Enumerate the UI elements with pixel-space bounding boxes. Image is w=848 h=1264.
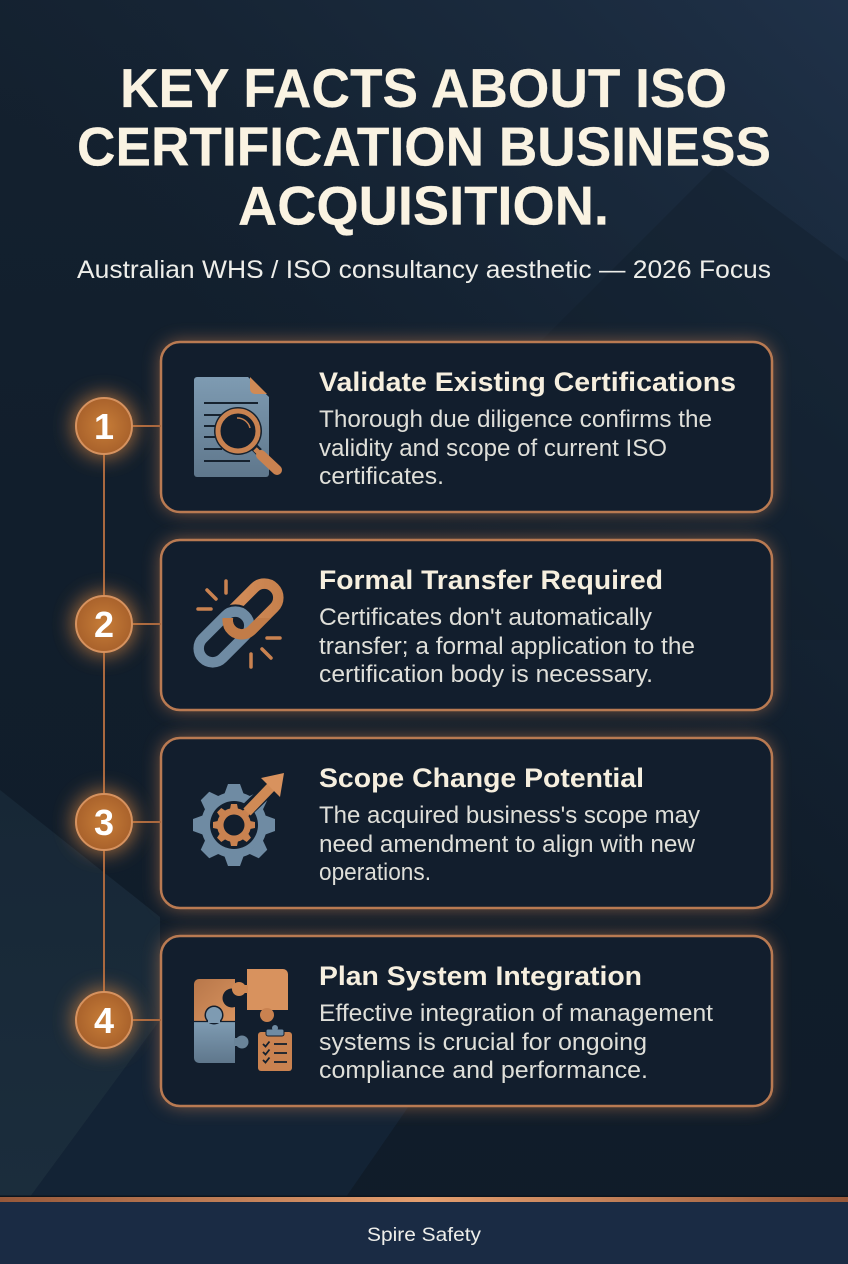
number badge 4 xyxy=(73,989,135,1051)
number badge 2: 2 xyxy=(94,604,114,645)
card body 4: compliance and performance. xyxy=(319,1057,648,1084)
icon: gear with arrow xyxy=(193,773,284,866)
card body 4: Effective integration of management xyxy=(319,1000,713,1027)
card body 4: systems is crucial for ongoing xyxy=(319,1029,647,1056)
panel: formal transfer required xyxy=(73,540,772,710)
footer band xyxy=(0,1196,848,1264)
card body 3: need amendment to align with new xyxy=(319,831,695,858)
subtitle: Australian WHS / ISO consultancy aesthetic — 2026 Focus xyxy=(77,256,771,284)
timeline spine xyxy=(103,426,105,1020)
title xyxy=(77,57,771,236)
panel: scope change potential xyxy=(73,738,772,908)
number badge 1: 1 xyxy=(94,406,114,447)
title: ACQUISITION. xyxy=(238,174,609,236)
card body 1: Thorough due diligence confirms the xyxy=(319,406,712,433)
card body 2: certification body is necessary. xyxy=(319,661,653,688)
card body 3 xyxy=(319,802,701,886)
panel: plan system integration xyxy=(73,936,772,1106)
number badge 4: 4 xyxy=(94,1000,114,1041)
card body 4 xyxy=(319,1000,713,1084)
icon: puzzle pieces and clipboard xyxy=(194,969,292,1071)
card heading 4: Plan System Integration xyxy=(319,961,642,991)
card body 2: transfer; a formal application to the xyxy=(319,633,695,660)
number badge 2 xyxy=(73,593,135,655)
card heading 2: Formal Transfer Required xyxy=(319,565,663,595)
panel: validate existing certifications xyxy=(73,342,772,512)
number badge 3: 3 xyxy=(94,802,114,843)
card body 2: Certificates don't automatically xyxy=(319,604,653,631)
card heading 1: Validate Existing Certifications xyxy=(319,367,736,397)
card body 3: operations. xyxy=(319,859,431,886)
card body 1 xyxy=(319,406,712,490)
card body 2 xyxy=(319,604,695,688)
footer brand text: Spire Safety xyxy=(367,1224,481,1246)
card body 1: certificates. xyxy=(319,463,444,490)
card heading 3: Scope Change Potential xyxy=(319,763,644,793)
number badge 3 xyxy=(73,791,135,853)
icon: broken chain link xyxy=(193,578,284,668)
title: CERTIFICATION BUSINESS xyxy=(77,116,771,178)
title: KEY FACTS ABOUT ISO xyxy=(120,57,727,119)
card body 1: validity and scope of current ISO xyxy=(319,435,667,462)
icon: document with magnifier xyxy=(194,377,277,477)
card body 3: The acquired business's scope may xyxy=(319,802,701,829)
number badge 1 xyxy=(73,395,135,457)
